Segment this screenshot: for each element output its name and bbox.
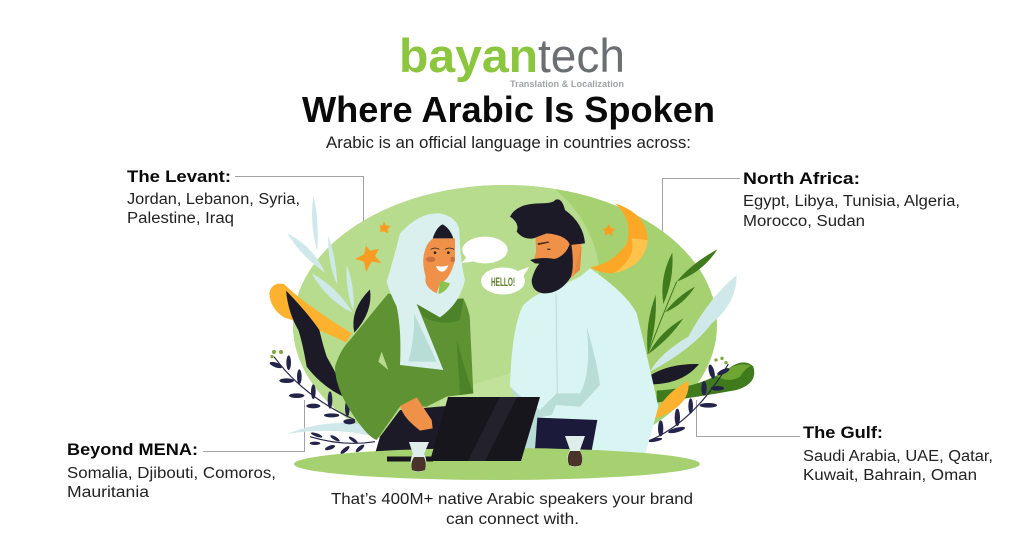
woman [335,213,473,452]
hand [400,397,433,431]
neck and face [547,247,582,287]
dark leaf [651,364,699,384]
speech bubbles [462,237,529,294]
right plants [590,203,754,443]
hair [510,199,585,245]
hijab [387,213,465,370]
text block: North Africa [743,169,960,230]
connector lines [203,176,800,452]
laptop [387,397,540,462]
text block: North Africa: North Africa: [743,169,860,188]
eye [537,241,550,250]
text block: The Levant: The Levant: [127,167,231,186]
text block: Beyond MENA: Somalia, Djibouti, Comoros, [67,465,276,482]
beard [532,240,573,293]
yellow swoosh [269,284,352,342]
dark green olive branch [647,249,717,354]
speech bubbles: HELLO! [491,277,515,289]
text block: The Levant [127,167,300,227]
face [423,238,455,293]
title: Where Arabic Is Spoken [302,89,715,130]
table [294,448,700,480]
text block: The Gulf: Kuwait, Bahrain, Oman [803,467,977,484]
logo: tech [538,29,625,82]
green background blob [293,185,717,438]
text block: The Gulf [803,423,993,484]
closing statement: That’s 400M+ native Arabic speakers your brand [331,491,693,508]
green swoosh [657,362,754,403]
dark leaves [286,291,347,398]
pale plume [650,275,737,372]
text block: North Africa: Morocco, Sudan [743,213,865,230]
small star [602,224,615,236]
subtitle: Arabic is an official language in countries across: [326,134,691,152]
yellow leaf [653,381,689,419]
text block: Beyond MENA: Mauritania [67,484,149,501]
navy branches [274,357,375,443]
crescent moon [590,203,648,273]
trousers [535,418,597,451]
logo: bayan [399,29,538,82]
left plants [269,196,391,455]
text block: The Gulf: The Gulf: [803,423,883,442]
closing statement: can connect with. [446,511,579,528]
green top [335,293,473,440]
stars [355,246,381,272]
navy branch [647,364,728,442]
skirt [376,406,447,452]
tea glass left [409,442,429,472]
text block: The Gulf: Saudi Arabia, UAE, Qatar, [803,448,993,465]
logo: Translation & Localization [510,79,624,90]
closing statement [331,491,693,528]
man [510,199,658,453]
shirt [510,268,658,453]
tea glass right [565,436,585,467]
pale leaves [287,196,375,437]
logo [399,29,625,90]
text block: North Africa: Egypt, Libya, Tunisia, Algeria, [743,193,960,210]
text block: The Levant: Palestine, Iraq [127,210,234,227]
illustration: two people talking with plants [269,170,754,480]
text block: Beyond MENA: Beyond MENA: [67,440,198,459]
text block: Beyond MENA [67,440,276,501]
text block: The Levant: Jordan, Lebanon, Syria, [127,191,300,208]
